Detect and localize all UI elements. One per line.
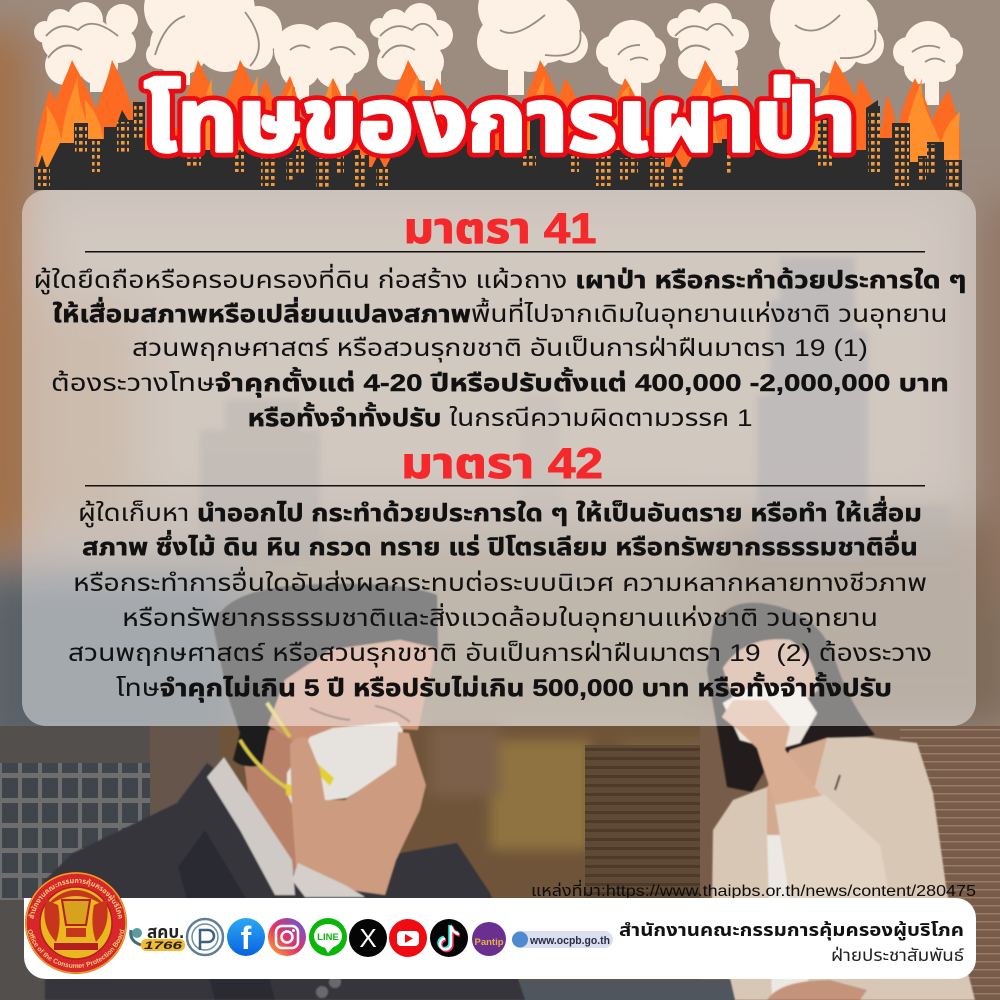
- shirt collar: [207, 757, 295, 895]
- body text: มาตรา 42: สวนพฤกษศาสตร์ หรือสวนรุกขชาติ อันเป็นการฝ่าฝืนมาตรา 19 (2) ต้องระวาง: [68, 640, 932, 668]
- office name: ฝ่ายประชาสัมพันธ์: [831, 946, 964, 965]
- office name: [619, 920, 964, 965]
- suit: [45, 763, 525, 1000]
- section: มาตรา 42: [68, 440, 932, 703]
- face: [723, 639, 818, 705]
- icon: X: [349, 919, 387, 957]
- smoke cloud 9: [893, 21, 963, 105]
- footer bar: [24, 898, 976, 979]
- buttons: [316, 986, 328, 998]
- smoke cloud 7: [667, 3, 749, 86]
- section: มาตรา 41: [34, 205, 966, 432]
- white top: [767, 835, 808, 1000]
- hand and arm: [722, 700, 825, 805]
- website pill: [512, 931, 613, 948]
- flames: inner layer: [36, 75, 960, 170]
- body text: มาตรา 42: สภาพ ซึ่งไม้ ดิน หิน กรวด ทราย แร่ ปิโตรเลียม หรือทรัพยากรธรรมชาติอื่น: [82, 530, 918, 561]
- body text: มาตรา 42: หรือกระทำการอื่นใดอันส่งผลกระทบต่อระบบนิเวศ ความหลากหลายทางชีวภาพ: [73, 566, 927, 597]
- city skyline: [34, 100, 962, 190]
- photo: woman wearing a mask: [707, 603, 975, 1000]
- face: [268, 640, 436, 745]
- website pill: www.ocpb.go.th: [529, 935, 610, 947]
- hair: [213, 584, 438, 767]
- smoke cloud 1: [34, 2, 138, 92]
- hotline logo: สคบ. 1766: 1766: [144, 940, 183, 952]
- skin at the neckline: [767, 738, 827, 838]
- body text: มาตรา 41: ให้เสื่อมสภาพหรือเปลี่ยนแปลงสภาพ พื้นที่ไปจากเดิมในอุทยานแห่งชาติ วนอุทยาน: [52, 297, 948, 329]
- smoke cloud 2: [144, 0, 282, 85]
- icon: X: X: [359, 923, 377, 953]
- source line: แหล่งที่มา:https://www.thaipbs.or.th/news/content/280475: [531, 879, 976, 900]
- mask: [287, 722, 403, 817]
- icon: Facebook: [227, 918, 265, 956]
- smoke cloud 8: [770, 0, 884, 88]
- body text: มาตรา 42: [68, 496, 932, 703]
- title: โทษของการเผาป่า: [144, 71, 856, 170]
- mask: [723, 687, 817, 750]
- icon: Instagram: [268, 918, 306, 956]
- seal: Office of the Consumer Protection Board: สำนักงานคณะกรรมการคุ้มครองผู้บริโภค: [28, 878, 122, 919]
- suit lapel: [178, 830, 275, 1000]
- mask strap: [240, 703, 290, 790]
- neck: [240, 730, 320, 880]
- body text: มาตรา 41: สวนพฤกษศาสตร์ หรือสวนรุกขชาติ อันเป็นการฝ่าฝืนมาตรา 19 (1): [132, 335, 868, 363]
- icon: Pantip: Pantip: [474, 937, 504, 948]
- body text: มาตรา 41: [34, 263, 966, 432]
- body text: มาตรา 41: ผู้ใดยึดถือหรือครอบครองที่ดิน ก่อสร้าง แผ้วถาง เผาป่า หรือกระทำด้วยประการใด ๆ: [34, 263, 966, 295]
- smoke cloud 3: [274, 22, 369, 100]
- smoke clouds: [34, 0, 963, 105]
- photo: man wearing a mask: [45, 584, 525, 1000]
- distant towers in the haze: [200, 257, 950, 560]
- seal: Office of the Consumer Protection Board: [25, 872, 127, 974]
- lower background: buildings: [0, 726, 240, 1000]
- hotline logo: สคบ. 1766: สคบ.: [147, 922, 184, 942]
- smoke cloud 5: [477, 0, 588, 95]
- office name: สำนักงานคณะกรรมการคุ้มครองผู้บริโภค: [619, 920, 964, 941]
- body text: มาตรา 42: โทษ จำคุกไม่เกิน 5 ปี หรือปรับไม่เกิน 500,000 บาท หรือทั้งจำทั้งปรับ: [116, 672, 892, 703]
- heading: มาตรา 42: มาตรา 42: [401, 440, 603, 488]
- blazer: [712, 737, 975, 1000]
- body text: มาตรา 42: หรือทรัพยากรธรรมชาติและสิ่งแวดล้อมในอุทยานแห่งชาติ วนอุทยาน: [122, 602, 878, 633]
- blazer sleeve: [775, 795, 890, 900]
- icon: Pantip: [472, 922, 506, 956]
- smoke cloud outlines: [46, 12, 945, 66]
- cuff: [292, 863, 365, 897]
- icon: Facebook: f: [241, 920, 252, 956]
- heading: มาตรา 41: มาตรา 41: [404, 205, 596, 253]
- icon: LINE: LINE: [317, 932, 339, 943]
- hair: [707, 603, 875, 792]
- smoke cloud 4: [370, 3, 453, 90]
- body text: มาตรา 42: ผู้ใดเก็บหา นำออกไป กระทำด้วยประการใด ๆ ให้เป็นอันตราย หรือทำ ให้เสื่อม: [78, 496, 922, 528]
- icon: LINE: [309, 918, 347, 956]
- smoke cloud 6: [596, 20, 666, 100]
- hand lower: [767, 980, 867, 1000]
- hand: [290, 732, 426, 895]
- flames: [36, 60, 960, 174]
- icon: CPB: [187, 919, 223, 955]
- body text: มาตรา 41: หรือทั้งจำทั้งปรับ ในกรณีความผิดตามวรรค 1: [248, 402, 752, 432]
- title: โทษของการเผาป่า: [144, 71, 856, 170]
- hotline logo: สคบ. 1766: [131, 922, 185, 952]
- flames: outer layer: [36, 60, 960, 174]
- content panel: [22, 190, 976, 726]
- icon: YouTube: [389, 919, 427, 957]
- icon: TikTok: [430, 919, 468, 957]
- seal: Office of the Consumer Protection Board: Office of the Consumer Protection Board: [28, 929, 124, 968]
- body text: มาตรา 41: ต้องระวางโทษ จำคุกตั้งแต่ 4-20 ปีหรือปรับตั้งแต่ 400,000 -2,000,000 บาท: [51, 367, 949, 398]
